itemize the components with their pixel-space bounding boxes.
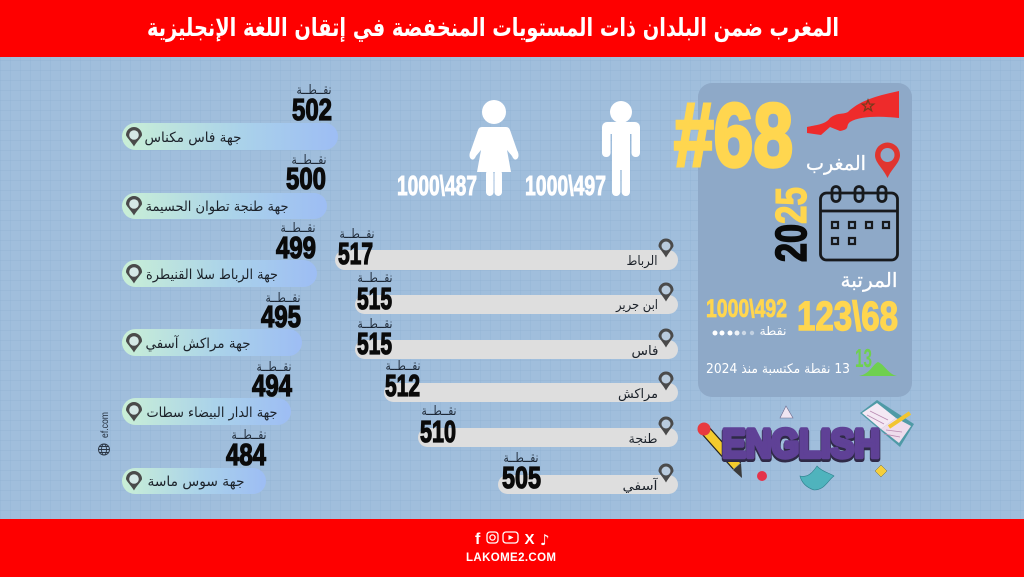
icon: red ball	[757, 471, 767, 481]
icon: location pin red	[875, 142, 900, 178]
city: Safi	[498, 451, 678, 495]
city: Rabat: الرباط	[626, 254, 658, 269]
city: Marrakech	[384, 359, 678, 403]
man stat: 1000\497	[525, 170, 606, 201]
social icons	[475, 531, 550, 549]
word ENGLISH: ENGLISH	[722, 422, 880, 466]
icon: triangle	[780, 406, 793, 418]
city: Marrakech: نقــطــة	[386, 359, 420, 374]
gain text: 13 نقطة مكتسبة منذ 2024	[706, 362, 850, 377]
region: Souss Massa: جهة سوس ماسة	[148, 474, 244, 490]
region: Souss Massa: نقــطــة	[232, 428, 266, 443]
region: Fes Meknes: جهة فاس مكناس	[144, 130, 242, 146]
city: Tangier: نقــطــة	[422, 404, 456, 419]
social icons: X	[524, 531, 535, 548]
region: Marrakech Safi	[122, 291, 302, 356]
icon: pencil	[698, 422, 742, 478]
city: Fes: فاس	[632, 344, 658, 359]
icon: Moroccan flag ribbon	[807, 91, 899, 135]
chart: cities	[335, 227, 678, 495]
rank number: #68	[674, 86, 793, 186]
city: Fes: 515	[357, 326, 392, 361]
region: Rabat Sale Kenitra: 499	[276, 230, 316, 265]
woman stat: 1000\487	[397, 170, 477, 201]
region: Rabat Sale Kenitra: جهة الرباط سلا القنيطرة	[146, 267, 278, 283]
region: Fes Meknes: 502	[292, 92, 332, 127]
source: ef.com	[99, 412, 111, 438]
icon: woman	[470, 100, 518, 196]
region: Souss Massa: 484	[226, 437, 267, 472]
region: Marrakech Safi: جهة مراكش آسفي	[146, 335, 250, 352]
city: Marrakech: مراكش	[618, 387, 658, 402]
chart: regions	[122, 83, 338, 494]
panel: Morocco summary	[674, 83, 912, 397]
city: Ben Guerir: 515	[357, 281, 392, 316]
gain icon: 13	[855, 343, 872, 373]
city: Tangier: طنجة	[628, 432, 658, 447]
icon: paper	[800, 466, 834, 490]
city: Tangier: 510	[420, 414, 456, 449]
region: Fes Meknes: نقــطــة	[296, 83, 332, 98]
region: Casablanca Settat: 494	[252, 368, 293, 403]
city: Fes	[355, 317, 678, 361]
city: Tangier	[418, 404, 678, 449]
region: Fes Meknes	[122, 83, 338, 150]
footer banner	[0, 519, 1024, 577]
social icons: ♪	[540, 531, 550, 549]
year rotated	[767, 187, 816, 262]
year rotated: 25	[767, 187, 816, 224]
city: Ben Guerir: ابن جرير	[615, 298, 658, 313]
website: LAKOME2.COM	[466, 552, 556, 564]
dots	[712, 330, 754, 336]
city: Marrakech: 512	[385, 368, 420, 403]
city: Safi: 505	[502, 460, 541, 495]
source	[98, 412, 111, 455]
region: Marrakech Safi: نقــطــة	[266, 291, 300, 306]
city: Rabat: نقــطــة	[340, 227, 374, 242]
region: Rabat Sale Kenitra	[122, 221, 317, 287]
region: Casablanca Settat: جهة الدار البيضاء سطات	[146, 405, 278, 421]
English illustration	[698, 400, 914, 490]
rank out of total: 123\68	[797, 293, 898, 339]
region: Rabat Sale Kenitra: نقــطــة	[280, 221, 316, 236]
city: Safi: نقــطــة	[504, 451, 538, 466]
score label: نقطة	[760, 324, 786, 338]
region: Casablanca Settat: نقــطــة	[256, 360, 292, 375]
city: Ben Guerir	[355, 271, 678, 316]
icon: calendar	[820, 186, 898, 260]
header banner	[0, 0, 1024, 57]
city: Fes: نقــطــة	[358, 317, 392, 332]
region: Casablanca Settat	[122, 360, 293, 425]
icon: man	[602, 101, 640, 196]
region: Tanger Tetouan Al Hoceima: نقــطــة	[292, 153, 326, 168]
icon: globe	[98, 444, 110, 455]
icon: yellow diamond	[875, 465, 887, 477]
city: Rabat: 517	[338, 236, 373, 271]
word ENGLISH: ENGLISH	[722, 424, 880, 468]
rank label: المرتبة	[840, 268, 898, 292]
city: Ben Guerir: نقــطــة	[358, 271, 392, 286]
region: Marrakech Safi: 495	[261, 299, 301, 334]
year rotated: 20	[767, 224, 816, 262]
title: المغرب ضمن البلدان ذات المستويات المنخفضة في إتقان اللغة الإنجليزية	[147, 13, 839, 43]
region: Tanger Tetouan Al Hoceima	[122, 153, 327, 219]
gain icon	[855, 343, 897, 376]
score: 1000\492	[706, 295, 787, 323]
icon: book	[860, 400, 914, 447]
country name: المغرب	[806, 151, 866, 175]
social icons: f	[475, 531, 481, 548]
city: Rabat	[335, 227, 678, 271]
city: Safi: آسفي	[622, 477, 659, 494]
region: Souss Massa	[122, 428, 267, 494]
region: Tanger Tetouan Al Hoceima: جهة طنجة تطوان الحسيمة	[146, 199, 288, 215]
region: Tanger Tetouan Al Hoceima: 500	[286, 161, 326, 196]
